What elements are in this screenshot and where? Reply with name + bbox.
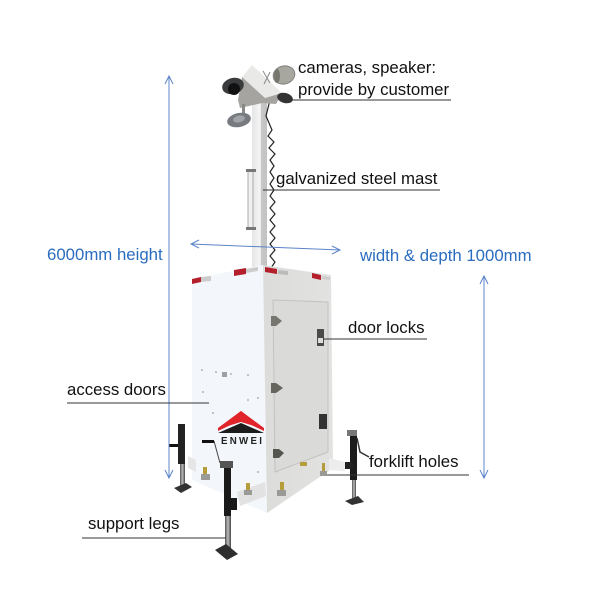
rear left leg (169, 424, 192, 493)
ENWEI logo: ENWEI (221, 436, 264, 447)
callout: door locks (323, 318, 427, 339)
height label: 6000mm height (47, 245, 163, 264)
callout: door locks: door locks (348, 318, 424, 337)
callout: access doors: access doors (67, 380, 166, 399)
door hinges (271, 316, 282, 326)
width arrow (191, 240, 340, 254)
callout: cameras, speaker (291, 58, 451, 100)
cabinet left face (192, 265, 267, 513)
equipment cabinet (188, 265, 345, 513)
icon: dome camera (226, 111, 252, 129)
callout: forklift holes: forklift holes (369, 452, 459, 471)
icon: right camera (276, 91, 294, 105)
right leg (345, 430, 369, 505)
galvanized steel mast (246, 100, 275, 270)
icon: speaker (271, 63, 297, 87)
height arrow (165, 76, 173, 478)
callout: galvanized steel mast: galvanized steel mast (276, 169, 438, 188)
cabinet right face (263, 265, 333, 513)
cameras and speaker head (220, 63, 297, 129)
panel dots (201, 369, 259, 473)
front centre leg (202, 440, 238, 560)
warning labels (203, 462, 325, 490)
forklift slots (237, 482, 266, 506)
callout: support legs: support legs (88, 514, 179, 533)
support legs (169, 424, 369, 560)
door locks (317, 329, 324, 346)
callout: cameras, speaker: cameras, speaker: (298, 58, 436, 77)
camera housing (242, 65, 282, 98)
door panel (273, 300, 328, 472)
ENWEI logo (218, 411, 264, 447)
depth arrow (480, 276, 488, 478)
icon: left camera (220, 75, 246, 97)
width label: width & depth 1000mm (359, 246, 532, 265)
callout: cameras, speaker: provide by customer (298, 80, 450, 99)
reflective strips (192, 277, 201, 284)
